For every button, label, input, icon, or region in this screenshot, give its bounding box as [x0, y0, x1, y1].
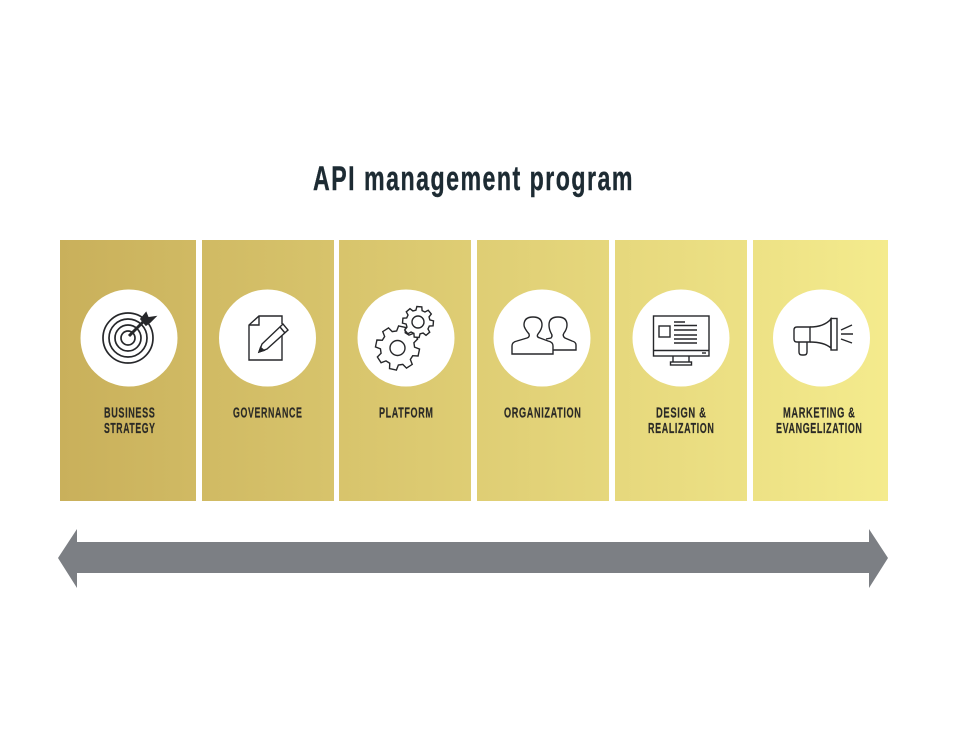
label: platform: PLATFORM	[379, 406, 434, 422]
label: marketing and evangelization	[776, 406, 862, 437]
double-headed arrow	[58, 529, 888, 588]
icon: monitor	[654, 316, 709, 365]
title: API management program	[313, 160, 634, 198]
label: business strategy: STRATEGY	[104, 421, 156, 437]
label: marketing and evangelization: EVANGELIZATION	[776, 421, 862, 437]
panel: marketing and evangelization	[753, 240, 888, 501]
label: business strategy: BUSINESS	[104, 406, 156, 422]
panel: design and realization	[615, 240, 747, 501]
label: marketing and evangelization: MARKETING &	[783, 406, 856, 422]
icon: megaphone	[794, 318, 853, 355]
label: design and realization: DESIGN &	[656, 406, 706, 422]
panel: governance	[202, 240, 334, 501]
panel: organization	[477, 240, 609, 501]
icon: target with arrow	[103, 313, 155, 363]
icon: gears	[372, 305, 435, 374]
label: organization: ORGANIZATION	[504, 406, 582, 422]
label: design and realization	[648, 406, 714, 437]
panel: business strategy	[60, 240, 196, 501]
label: business strategy	[104, 406, 156, 437]
icon: document with pencil	[249, 316, 288, 360]
panel: platform	[339, 240, 471, 501]
icon: people	[512, 317, 576, 354]
label: governance: GOVERNANCE	[233, 406, 302, 422]
label: design and realization: REALIZATION	[648, 421, 714, 437]
